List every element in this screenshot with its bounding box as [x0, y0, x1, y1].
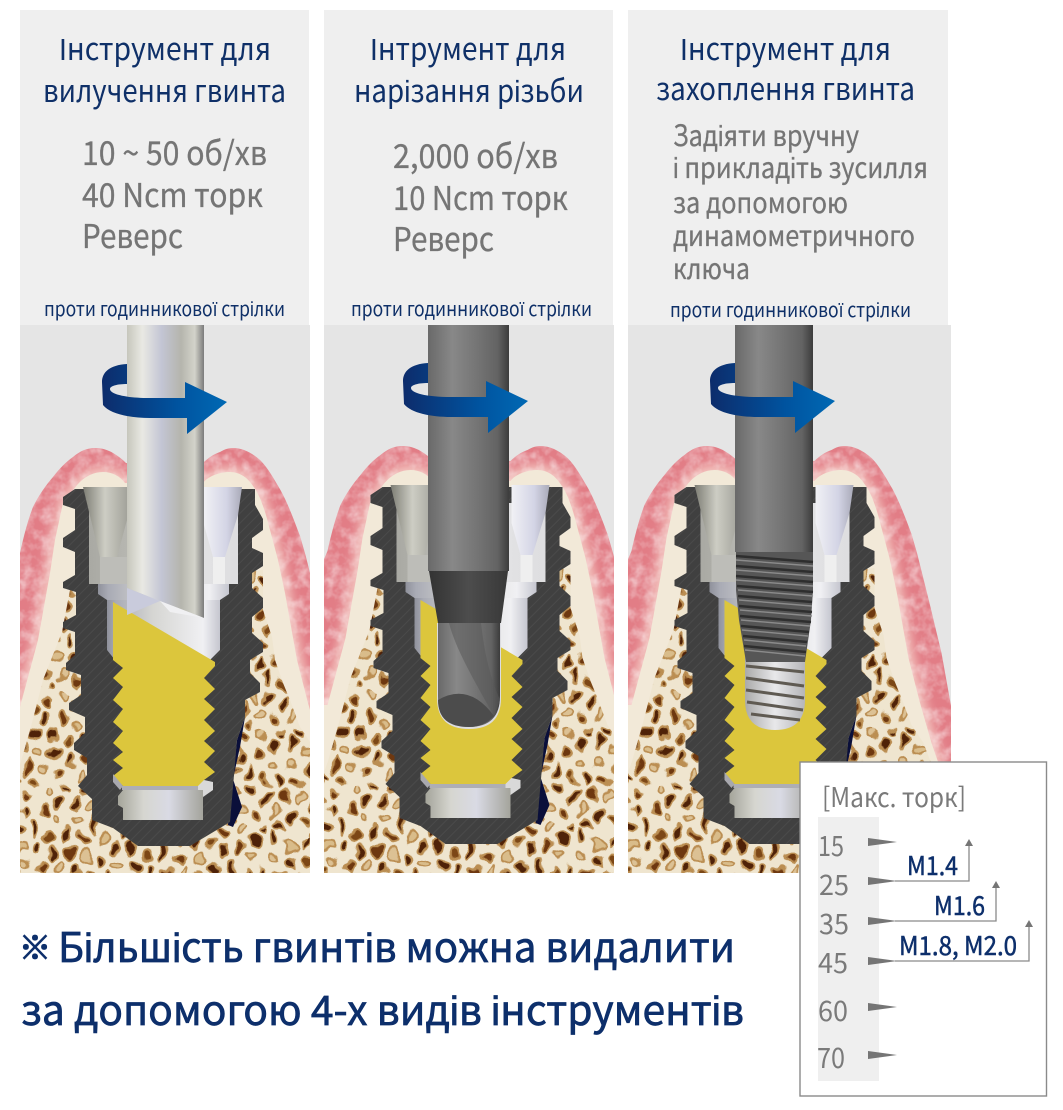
specifications: 2,000 об/хв — [393, 130, 558, 178]
specifications — [393, 130, 568, 261]
torque scale numbers: 25 — [819, 864, 849, 904]
torque scale numbers: 15 — [818, 825, 844, 865]
instructions: динамометричного — [673, 213, 915, 255]
heading: Інструмент для — [680, 24, 891, 69]
instructions: Задіяти вручну — [673, 113, 859, 155]
illustration: implant with removal tool — [20, 325, 310, 873]
heading — [43, 24, 286, 111]
footnote text: Більшість гвинтів можна видалити — [58, 914, 735, 974]
instructions: за допомогою — [673, 180, 848, 222]
heading: Інтрумент для — [370, 24, 566, 69]
header background — [324, 10, 613, 325]
panel: maximum torque legend — [800, 762, 1046, 1096]
callout: M1.4: M1.4 — [907, 846, 958, 883]
callout: M1.6: M1.6 — [934, 886, 985, 923]
icon: rotation arrow — [710, 363, 835, 433]
panel: screw gripping tool — [628, 10, 951, 873]
instructions: ключа — [673, 246, 750, 288]
torque scale numbers: 35 — [819, 903, 849, 943]
specifications: 10 Ncm торк — [393, 172, 568, 220]
panel: thread cutting tool — [324, 10, 614, 873]
header background — [628, 10, 948, 325]
specifications: 10 ~ 50 об/хв — [82, 127, 267, 175]
specifications: Реверс — [82, 210, 183, 258]
torque scale numbers: 45 — [818, 942, 848, 982]
footnote text: ※ — [19, 923, 51, 969]
specifications — [82, 127, 267, 258]
instructions — [673, 113, 928, 288]
callout: M1.4 — [895, 839, 973, 883]
direction caption: проти годинникової стрілки — [351, 293, 592, 322]
heading: Інструмент для — [59, 24, 271, 69]
callout: M1.8, M2.0: M1.8, M2.0 — [899, 926, 1017, 963]
illustration: implant with thread cutter — [324, 325, 614, 873]
instructions: і прикладіть зусилля — [673, 145, 928, 187]
icon: rotation arrow — [102, 364, 227, 434]
heading — [656, 24, 915, 109]
illustration: implant with gripping tool — [628, 325, 951, 873]
panel: screw removal tool — [20, 10, 310, 873]
direction caption: проти годинникової стрілки — [670, 294, 911, 323]
footnote text — [19, 914, 744, 1037]
legend heading: [Макс. торк] — [822, 776, 966, 815]
heading: нарізання різьби — [354, 66, 584, 111]
specifications: Реверс — [393, 213, 494, 261]
torque scale strip — [818, 817, 879, 1081]
heading — [354, 24, 584, 111]
icon: rotation arrow — [403, 363, 528, 433]
footnote text: за допомогою 4-х видів інструментів — [21, 977, 744, 1037]
torque scale numbers — [817, 825, 849, 1077]
specifications: 40 Ncm торк — [82, 169, 263, 217]
callout: M1.6 — [895, 881, 1000, 923]
scale pointers — [868, 838, 897, 1059]
direction caption: проти годинникової стрілки — [44, 293, 285, 322]
torque scale numbers: 60 — [818, 990, 848, 1030]
torque scale numbers: 70 — [817, 1037, 845, 1077]
heading: захоплення гвинта — [656, 64, 915, 109]
heading: вилучення гвинта — [43, 66, 286, 111]
header background — [20, 10, 309, 325]
